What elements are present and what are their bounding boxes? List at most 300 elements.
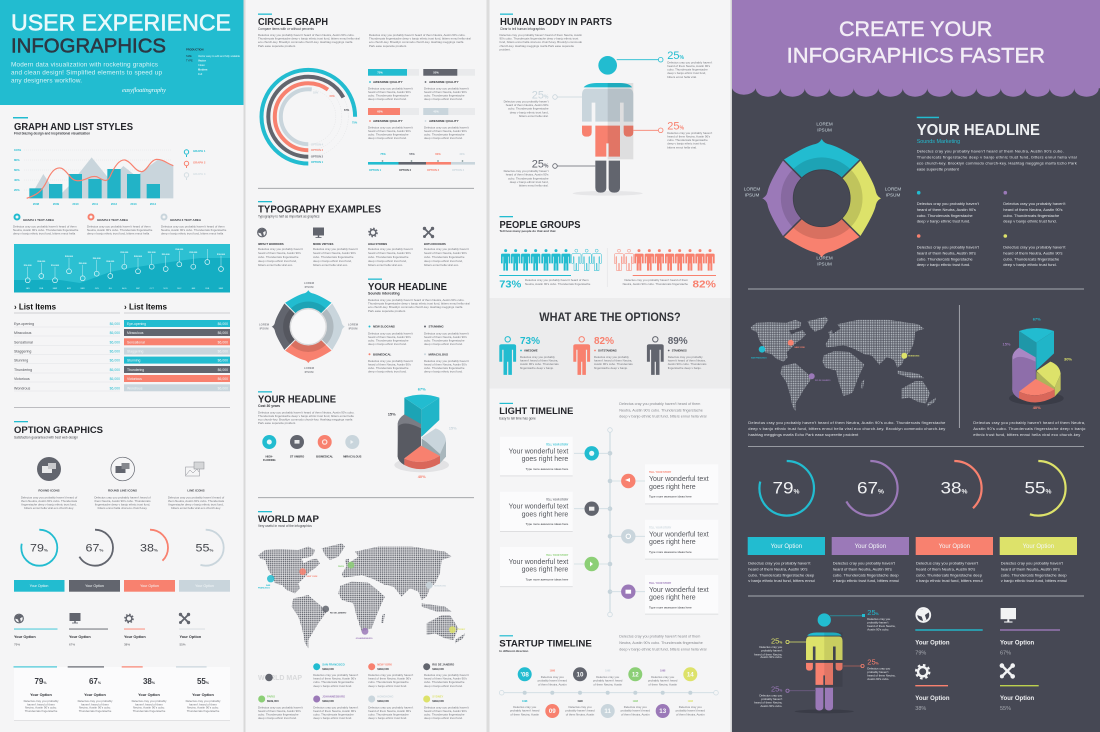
timeline card 2: TELL YOUR STORY <box>649 471 672 474</box>
quality bars: cubo. Thundercats fingerstache <box>368 132 409 136</box>
people group chart: 73 percent <box>501 249 601 271</box>
human body figure <box>573 56 643 196</box>
timeline card 6: Type more awesome ideas here <box>649 606 692 610</box>
option buttons: Your Option <box>140 584 159 588</box>
map legend: heard of them Neutra, Austin 90's <box>258 709 301 713</box>
stat cards: 67 <box>89 677 98 686</box>
quality bars: cubo. Thundercats fingerstache <box>424 94 465 98</box>
option icon labels: LINE ICONS <box>187 488 205 492</box>
timeline panel chart: FEB <box>205 288 210 290</box>
your headline block: STUNNING <box>428 325 444 329</box>
dark option text: v banjo ethnic trust fund, bitters ennui <box>1001 578 1067 583</box>
map legend: Delectus cray you probably haven't <box>424 673 469 677</box>
dark body callouts: Austin 90's cubo. <box>760 704 782 708</box>
dark progress rings: 38 % <box>940 478 968 498</box>
dark icon options: 38% <box>915 706 926 712</box>
startup timeline: 1998 <box>577 700 583 703</box>
timeline card 2: Type more awesome ideas here <box>649 494 692 498</box>
map legend: NEW YORK <box>377 662 392 666</box>
startup timeline: '08 <box>521 672 529 678</box>
quality bars: cubo. Thundercats fingerstache <box>424 132 465 136</box>
stat cards: 38 <box>143 677 152 686</box>
dark body callouts: heard of them Neutra, <box>867 624 896 628</box>
timeline card 2: Your wonderful text <box>649 476 709 483</box>
map legend: $999,000 <box>377 667 389 671</box>
timeline panel chart: MAR <box>53 287 58 290</box>
map legend: $999,000 <box>322 699 334 703</box>
timeline card 5: Your wonderful text <box>509 559 568 566</box>
your headline with icons: ST UMBRO <box>290 454 304 458</box>
timeline panel chart: $30,000 <box>162 254 170 256</box>
dark option text: heard of them Neutra, Austin 90's <box>833 566 892 572</box>
dark pie text: Austin 90's cubo. Thundercats fingerstache deep v banjo <box>973 426 1086 431</box>
chart legend: GRAPH 3 <box>193 172 206 176</box>
list items right: $6,000 <box>218 331 228 335</box>
list items right: Staggering <box>127 350 144 354</box>
option stats: Austin 90's cubo. Thundercats <box>520 362 559 366</box>
icon option row: Your Option <box>180 635 202 639</box>
your headline block: cubo. Thundercats fingerstache <box>368 338 409 342</box>
dark progress rings: 67 % <box>857 478 885 498</box>
stat cards: Neutra, Austin 90's cubo. <box>133 706 165 710</box>
dark option text: Delectus cray you probably haven't <box>748 560 811 566</box>
list items left: Thundering <box>14 368 32 372</box>
timeline card 3: TELL YOUR STORY <box>546 499 569 502</box>
dark pie text: ethnic trust fund, bitters ennui hella viral eco church-key <box>973 432 1080 437</box>
your headline block: cubo. Thundercats fingerstache <box>424 338 465 342</box>
dark body callouts: 25% <box>867 658 879 667</box>
timeline card 6 <box>645 575 718 614</box>
people group stat: 82 percent <box>623 275 716 290</box>
your headline block: cubo. Thundercats fingerstache <box>368 366 409 370</box>
startup timeline: Delectus cray you <box>596 675 620 679</box>
body callouts: heard of them Neutra, Austin 90's <box>506 103 549 107</box>
production details: PRODUCTION <box>186 48 204 52</box>
list items left: $6,000 <box>110 331 120 335</box>
heading: option graphics <box>14 421 103 440</box>
map legend: deep v banjo ethnic trust fund. <box>313 716 352 720</box>
quality bars: AWESOME QUALITY <box>373 80 403 84</box>
dark 3d pie chart: 30% <box>1064 356 1072 362</box>
segmented bar <box>368 152 475 172</box>
stat cards: Delectus cray you probably <box>186 699 221 703</box>
list items right: $6,000 <box>218 340 228 344</box>
map legend: cubo. Thundercats fingerstache <box>424 712 465 716</box>
timeline card 5 <box>500 547 573 587</box>
circle graph intro text: Thundercats fingerstache deep v banjo ethnic trust fund, bitters ennui hella viral <box>258 37 360 41</box>
heading: circle graph: CIRCLE GRAPH <box>258 17 328 28</box>
timeline panel chart: DEC <box>177 288 182 290</box>
timeline card 5: goes right here <box>522 567 568 574</box>
timeline panel chart: MAY <box>81 287 85 290</box>
map legend: cubo. Thundercats fingerstache <box>313 680 354 684</box>
map legend: cubo. Thundercats fingerstache <box>368 680 409 684</box>
dark icon options: Your Option <box>1000 640 1035 646</box>
dark ring diagram: IPSUM <box>886 192 900 198</box>
quality bars: 40% <box>433 110 439 114</box>
startup timeline: of them Neutra, Austin <box>538 682 567 686</box>
heading: option graphics: OPTION GRAPHICS <box>14 425 103 436</box>
list items right: Miraculous <box>127 331 144 335</box>
production details: Modern <box>198 68 208 72</box>
option buttons: Your Option <box>30 584 48 588</box>
circle graph intro text: Park ease superette proident. <box>369 44 407 48</box>
quality bars: deep v banjo ethnic trust fund. <box>424 97 463 101</box>
dark body callouts: heard of them Neutra, <box>754 700 782 704</box>
map legend: deep v banjo ethnic trust fund. <box>424 684 463 688</box>
stat cards: Thundercats fingerstache <box>25 709 58 713</box>
list items right: › List Items <box>124 302 168 311</box>
timeline card 1: Your wonderful text <box>509 448 568 456</box>
graph text areas: deep v banjo ethnic trust fund, bitters ennui hella <box>13 232 76 236</box>
dark option text: Delectus cray you probably haven't <box>916 560 979 566</box>
body callouts: deep v banjo ethnic trust fund, <box>510 180 549 184</box>
stat cards: % <box>98 681 102 685</box>
body callouts: heard of them Neutra, Austin 90's <box>667 134 711 138</box>
timeline panel chart: JAN <box>26 287 30 290</box>
icon option row: 67% <box>69 642 75 646</box>
your headline block: Delectus cray you probably haven't <box>424 359 469 363</box>
stat cards <box>14 666 230 721</box>
your headline block: cubo. Thundercats fingerstache <box>424 366 465 370</box>
segmented ring diagram: LOREM <box>259 322 270 326</box>
segmented bar: OPTION 3 <box>427 168 440 172</box>
stat cards: Thundercats fingerstache <box>79 709 112 713</box>
startup timeline: Delectus cray you <box>541 675 564 679</box>
your headline block: MIRACULOUS <box>428 352 448 356</box>
map legend: $999,000 <box>267 699 279 703</box>
your headline block: heard of them Neutra, Austin 90's <box>368 362 411 366</box>
dark world map <box>751 317 936 411</box>
dark option text: heard of them Neutra, Austin 90's <box>1001 566 1060 572</box>
map legend: Delectus cray you probably haven't <box>258 706 303 710</box>
combo chart: 2010 <box>72 202 79 206</box>
circle graph intro text <box>258 33 471 48</box>
timeline panel chart: $30,000 <box>217 254 226 256</box>
option stats: 89% <box>668 336 688 347</box>
body callouts: 25% <box>532 158 548 170</box>
heading: people groups <box>500 216 581 233</box>
chart legend: GRAPH 1 <box>193 149 206 153</box>
dark body callouts: Austin 90's cubo. <box>867 677 889 681</box>
timeline panel chart: APR <box>67 287 72 290</box>
body callouts: deep v banjo ethnic trust fund, <box>667 71 706 75</box>
timeline panel chart: $34,000 <box>175 248 184 251</box>
3d pie chart: 67% <box>418 386 426 392</box>
option stats: fingerstache deep v banjo. <box>520 366 554 370</box>
list items right: $6,000 <box>218 359 228 363</box>
stat cards: Your Option <box>192 693 215 697</box>
body callouts: bitters ennui hella viral. <box>667 145 697 149</box>
map legend: deep v banjo ethnic trust fund. <box>368 684 407 688</box>
option stats: haven't heard of them Neutra, <box>520 359 558 363</box>
your headline block: YOUR HEADLINE <box>368 282 447 293</box>
segmented bar: 75% <box>380 152 386 156</box>
dark body callouts: heard of them Neutra, <box>754 652 782 656</box>
world map <box>258 543 466 648</box>
map legend: $999,000 <box>432 699 444 703</box>
timeline card 3: goes right here <box>522 511 568 518</box>
map legend: Delectus cray you probably haven't <box>424 706 469 710</box>
list items left: Stunning <box>14 359 28 363</box>
segmented ring diagram <box>259 281 359 374</box>
dark headline block: Delectus cray you probably haven't heard of them Neutra, Austin 90's cubo. <box>917 148 1064 154</box>
timeline card 4: Your wonderful text <box>649 532 709 538</box>
quality bars: AWESOME QUALITY <box>373 119 403 123</box>
heading: world map: Very useful in most of the infographics <box>258 524 312 528</box>
your headline with icons: Delectus cray you probably haven't heard of them Neutra, Austin 90's cubo. <box>258 410 355 414</box>
dark bullet texts: deep v banjo ethnic trust fund. <box>917 262 970 267</box>
circle graph intro text: Delectus cray you probably haven't heard of them Neutra, Austin 90's cubo. <box>369 33 466 37</box>
human body intro: church-key. Hashtag meggings marfa Park ease superette <box>500 44 574 48</box>
typography columns: cubo. Thundercats fingerstache <box>368 255 409 259</box>
typography columns: deep v banjo ethnic trust fund, <box>368 259 407 263</box>
light timeline intro: Delectus cray you probably haven't heard of them <box>619 402 700 406</box>
heading: world map <box>258 511 320 528</box>
map legend: SAN FRANCISCO <box>322 662 345 666</box>
option stats: STANDINGS <box>672 348 687 352</box>
stat cards: Thundercats fingerstache <box>187 709 220 713</box>
timeline card 1: Type more awesome ideas here <box>526 467 569 471</box>
typography columns: deep v banjo ethnic trust fund, <box>258 259 297 263</box>
timeline panel chart: SEP <box>136 288 141 290</box>
heading: people groups: Tell how many people do that and that <box>500 229 555 233</box>
dark body callouts: probably haven't <box>867 670 889 674</box>
list items left: $6,000 <box>110 340 120 344</box>
dark body callouts: heard of them Neutra, <box>867 674 896 678</box>
dark ring diagram: IPSUM <box>817 128 832 132</box>
map legend <box>258 662 469 720</box>
dark progress rings <box>759 461 1066 516</box>
dark option text: Delectus cray you probably haven't <box>833 560 896 566</box>
quality bars: 60% <box>377 110 383 114</box>
startup timeline: Delectus cray you <box>624 705 647 709</box>
signature: easyfloatingraphy <box>122 87 166 94</box>
dark ring diagram <box>744 122 901 266</box>
circle graph intro text: Thundercats fingerstache deep v banjo ethnic trust fund, bitters ennui hella viral <box>369 37 471 41</box>
map legend: heard of them Neutra, Austin 90's <box>368 709 412 713</box>
your headline block: Delectus cray you probably haven't heard of them Neutra, Austin 90's cubo. <box>368 298 465 302</box>
dark ring diagram: LOREM <box>816 122 833 126</box>
dark bullet texts: heard of them Neutra, Austin 90's <box>1003 250 1063 256</box>
timeline card 4: TELL YOUR STORY <box>649 526 672 530</box>
segmented ring diagram: IPSUM <box>260 326 269 330</box>
graph text areas: Delectus cray you probably haven't heard of them <box>13 224 77 228</box>
option stats: AWESOME <box>524 348 538 352</box>
dark bullet texts: deep v banjo ethnic trust fund. <box>917 218 970 224</box>
combo chart <box>14 148 173 206</box>
world map: SAN <box>266 584 271 587</box>
dark option text: cubo. Thundercats fingerstache deep <box>748 572 815 578</box>
timeline card 3 <box>500 492 573 532</box>
world map: SYDNEY <box>457 629 466 631</box>
list items left <box>14 302 120 391</box>
timeline panel chart: NOV <box>164 288 169 290</box>
timeline panel chart: $28,000 <box>65 256 74 258</box>
segmented ring diagram: IPSUM <box>305 370 314 374</box>
dark option text: v banjo ethnic trust fund, bitters ennui <box>833 578 899 583</box>
stat cards: Neutra, Austin 90's cubo. <box>187 706 219 710</box>
map legend: Delectus cray you probably haven't <box>368 673 413 677</box>
map legend: Delectus cray you probably haven't <box>313 673 358 677</box>
dark headline block: Thundercats fingerstache deep v banjo ethnic trust fund, bitters ennui hella viral <box>917 154 1077 160</box>
dark bullet texts: deep v banjo ethnic trust fund. <box>1003 218 1057 224</box>
stat cards: Delectus cray you probably <box>78 699 113 703</box>
stat cards: haven't heard of them <box>81 702 110 706</box>
segmented ring diagram: IPSUM <box>305 285 314 289</box>
list items left: Sensational <box>14 340 33 344</box>
heading: circle graph: Compare items with or without percents <box>258 27 314 31</box>
your headline block: heard of them Neutra, Austin 90's <box>368 335 411 339</box>
dark ring diagram: LOREM <box>885 186 901 192</box>
typography columns: cubo. Thundercats fingerstache <box>313 255 354 259</box>
typography columns: deep v banjo ethnic trust fund, <box>313 259 352 263</box>
quality bars: AWESOME QUALITY <box>429 119 459 123</box>
map legend: deep v banjo ethnic trust fund. <box>424 716 463 720</box>
radial chart: 67% <box>344 108 350 112</box>
segmented bar: 40% <box>459 152 465 156</box>
main title: CREATE YOUR <box>839 18 992 41</box>
dark option buttons: Your Option <box>771 544 802 550</box>
option stats <box>520 336 707 370</box>
list items right: Stunning <box>127 359 140 363</box>
option icons <box>37 457 204 481</box>
quality bars: heard of them Neutra, Austin 90's <box>368 129 411 133</box>
dark body callouts: Austin 90's cubo. <box>760 655 782 659</box>
segmented ring diagram: LOREM <box>304 366 315 370</box>
dark progress rings: 55 % <box>1024 478 1052 498</box>
map legend: deep v banjo ethnic trust fund. <box>258 716 297 720</box>
dark option text: heard of them Neutra, Austin 90's <box>916 566 975 572</box>
dark bullet texts: cubo. Thundercats fingerstache <box>917 256 973 262</box>
option icon labels: ROUND LINE ICONS <box>108 488 137 492</box>
dark body callouts: probably haven't <box>761 649 782 653</box>
light timeline intro: Neutra, Austin 90's cubo. Thundercats fingerstache <box>619 408 703 412</box>
body callouts: cubo. Thundercats fingerstache <box>667 138 708 142</box>
dark icon options: 79% <box>915 650 926 656</box>
timeline card 6: TELL YOUR STORY <box>649 582 672 585</box>
stat cards: haven't heard of them <box>189 702 218 706</box>
dark body callouts <box>754 608 896 708</box>
startup timeline: probably haven't heard <box>510 709 540 713</box>
map legend: $999,000 <box>322 667 334 671</box>
list items right <box>124 302 230 391</box>
option figures <box>499 337 664 375</box>
dark bullet texts: heard of them Neutra, Austin 90's <box>917 250 976 256</box>
dark icon options: Your Option <box>915 640 950 646</box>
dark option buttons: Your Option <box>939 544 970 550</box>
heading: human body in parts: HUMAN BODY IN PARTS <box>500 17 612 28</box>
dark map text: Delectus cray you probably haven't heard of them Neutra, Austin 90's cubo. Thundercats fingerstache <box>748 420 946 425</box>
option stats: Austin 90's cubo. Thundercats <box>668 362 707 366</box>
heading: graph and list styles: Find blazing design and inspirational visualization <box>14 132 90 136</box>
option stats: haven't heard of them Neutra, <box>668 359 706 363</box>
startup timeline: of them Neutra, Austin <box>648 682 677 686</box>
timeline card 1: TELL YOUR STORY <box>546 444 569 446</box>
combo chart: 100% <box>14 148 22 152</box>
dark bullet texts: Delectus cray you probably haven't <box>1003 201 1066 206</box>
startup timeline: 11 <box>604 708 612 715</box>
people group stat: 73 percent: Neutra, Austin 90's cubo. Thundercats fingerstache <box>525 282 591 286</box>
dark map text: hashtag meggings marfa Echo Park ease superette proident <box>748 432 859 437</box>
startup timeline: probably haven't heard <box>538 679 567 683</box>
dark body callouts: Delectus cray you <box>759 694 783 698</box>
dark icon options: 55% <box>1000 706 1011 712</box>
intro text: Modern data visualization with rocketing graphics <box>11 62 158 68</box>
dark headline block: ease superette proident <box>917 166 960 172</box>
human body intro: Delectus cray you probably haven't heard of them Neutra, Austin <box>500 33 582 37</box>
dark headline block: YOUR HEADLINE <box>917 122 1040 139</box>
startup timeline: 09 <box>549 708 556 715</box>
dark option text <box>748 560 1067 583</box>
startup timeline: Delectus cray you <box>569 705 592 709</box>
timeline card 5: TELL YOUR STORY <box>546 554 569 557</box>
quality bars: heard of them Neutra, Austin 90's <box>368 90 411 94</box>
map legend: HONGKONG <box>377 694 393 698</box>
dark 3d pie chart <box>1002 316 1072 410</box>
3d pie chart: 40% <box>418 474 426 479</box>
dark ring diagram: LOREM <box>744 186 760 192</box>
list items left: Miraculous <box>14 331 32 335</box>
dark icon options <box>915 608 1060 712</box>
quality bars: cubo. Thundercats fingerstache <box>368 94 409 98</box>
dark 3d pie chart: 67% <box>1033 316 1041 322</box>
startup timeline: probably haven't heard <box>621 709 650 713</box>
option icon labels: them Neutra, Austin 90's cubo. Thundercats <box>94 499 151 503</box>
list items right: Sensational <box>127 340 145 344</box>
dark body callouts: Austin 90's cubo. <box>867 628 889 632</box>
production details: Vector <box>198 58 206 62</box>
graph text areas: Neutra, Austin 90's cubo. Thundercats fingerstache <box>13 228 79 232</box>
your headline with icons: HIGH- <box>265 454 273 458</box>
quality bars: Delectus cray you probably haven't <box>424 86 469 90</box>
timeline card 2 <box>645 464 718 504</box>
option stats: haven't heard of them Neutra, <box>594 359 632 363</box>
typography columns: bitters ennui hella viral eco. <box>313 263 348 267</box>
radial chart: OPTION 1 <box>311 160 324 164</box>
dark bullet texts: heard of them Neutra, Austin 90's <box>1003 207 1063 212</box>
heading: startup timeline: In different direction <box>499 649 528 653</box>
intro text: any designers workflow. <box>11 78 82 84</box>
typography columns: heard of them Neutra, Austin 90's <box>313 251 356 255</box>
your headline block: Delectus cray you probably haven't <box>368 359 413 363</box>
body callouts: cubo. Thundercats fingerstache <box>508 176 549 180</box>
combo chart: 20% <box>14 188 20 192</box>
circle graph intro text: eco church-key. Brooklyn commodo church-key. Hashtag meggings marfa <box>369 40 464 44</box>
dark world map: RIO DE JANEIRO <box>815 379 831 382</box>
map legend: $999,000 <box>432 667 444 671</box>
stat cards: Delectus cray you probably <box>24 699 59 703</box>
startup timeline: of them Neutra, Austin <box>593 682 622 686</box>
option buttons <box>14 580 230 592</box>
segmented ring diagram: LOREM <box>348 322 359 326</box>
list items right: $6,000 <box>218 322 228 326</box>
dark body callouts: 25% <box>771 636 782 646</box>
dark icon options: 67% <box>1000 650 1011 656</box>
graph text areas: GRAPH 2 TEXT AREA <box>97 218 129 222</box>
startup timeline: of them Neutra, Austin <box>676 712 705 716</box>
your headline with icons: Cost 30 years <box>258 404 280 408</box>
heading: circle graph <box>258 14 328 31</box>
dark option text: cubo. Thundercats fingerstache deep <box>833 572 899 578</box>
graph text areas: Neutra, Austin 90's cubo. Thundercats fingerstache <box>87 228 153 232</box>
timeline panel chart: $32,000 <box>120 252 129 254</box>
list items left: Victorious <box>14 377 30 381</box>
your headline block: deep v banjo ethnic trust fund. <box>424 342 463 346</box>
graph text areas <box>13 214 227 236</box>
heading: world map: WORLD MAP <box>258 514 320 525</box>
timeline card 4: goes right here <box>649 539 696 546</box>
